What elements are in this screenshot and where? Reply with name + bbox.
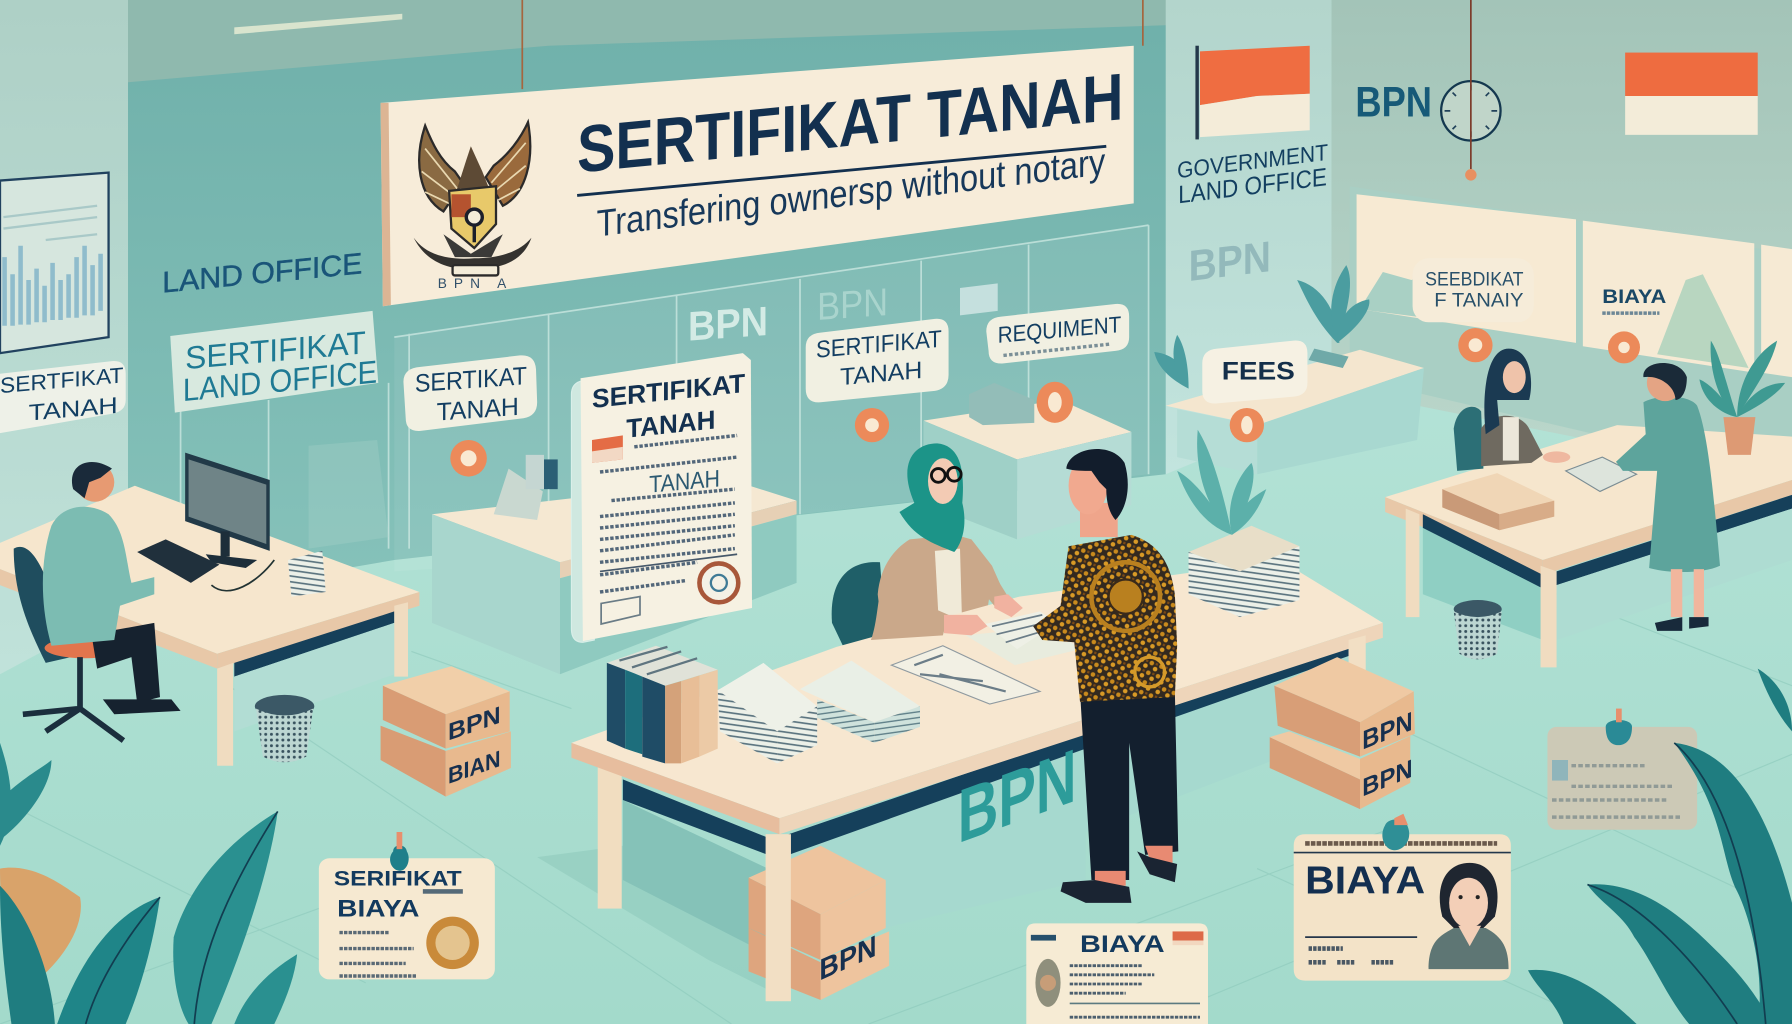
certificate document: TANAH [626, 404, 715, 444]
cardboard boxes under desk [749, 834, 889, 1001]
window label: seebdikat tanaiy: SEEBDIKAT [1425, 269, 1524, 291]
shirt [1033, 535, 1177, 702]
front leg [766, 834, 791, 1001]
bubble: fees with badge: FEES [1222, 357, 1295, 385]
monitor [185, 453, 270, 568]
jacket [875, 535, 1006, 640]
central service desk [571, 560, 1383, 1001]
left wall poster with chart [0, 173, 109, 353]
fees desk [1166, 349, 1424, 474]
standing person at right desk [1616, 363, 1720, 631]
blouse [935, 549, 962, 634]
window label: biaya: BIAYA [1602, 286, 1666, 308]
stacked papers on desk [718, 661, 920, 763]
cardboard boxes left [381, 666, 511, 797]
glass partitions [181, 225, 1149, 571]
sign subtitle text: Transfering ownersp without notary [597, 141, 1105, 246]
ankles [1095, 846, 1173, 886]
hair [1066, 449, 1128, 520]
orange badges on window [1458, 328, 1640, 363]
face [928, 458, 958, 504]
right desk with staff and papers [1385, 425, 1792, 667]
bubble: requirement with badge [986, 304, 1129, 423]
bubble: sertifikat tanah with badge: TANAH [840, 357, 922, 391]
plant on fees desk [1154, 265, 1369, 389]
shoes [1061, 880, 1131, 903]
bubble: sertikat tanah with badge: SERTIKAT [415, 362, 527, 398]
hijab [899, 443, 964, 552]
cardboard boxes left: BPN [448, 702, 501, 746]
cardboard boxes right: BPN [1362, 705, 1413, 755]
seated clerk at left desk [14, 462, 181, 741]
wall text: faded bpn: BPN [817, 281, 888, 329]
window label: seebdikat tanaiy: F TANAIY [1434, 289, 1523, 311]
notice on partition [960, 283, 998, 315]
glasses [931, 467, 961, 482]
bubble: sertikat tanah with badge [403, 355, 537, 477]
mouse and cable [211, 560, 274, 591]
bubble: sertifikat tanah with badge: SERTIFIKAT [816, 326, 942, 364]
card: biaya id with portrait [1294, 814, 1511, 981]
card: biaya id with portrait: BIAYA [1305, 860, 1425, 903]
flag on pillar [1195, 46, 1310, 139]
desk legs back [598, 766, 622, 909]
seated staff woman in hijab [832, 443, 1006, 647]
staff arms and hands over the desk [871, 544, 1023, 640]
loose forms on desk [891, 611, 1080, 704]
paper stack on desk [288, 551, 326, 597]
trousers [1080, 691, 1178, 880]
binders on desk [607, 646, 718, 763]
flag on right wall [1625, 53, 1758, 135]
right leg [1349, 635, 1366, 709]
bubble: sertifkat tanah [0, 361, 126, 433]
plant on stacked documents [1177, 430, 1299, 617]
seated woman at right desk [1454, 349, 1570, 471]
cardboard boxes left: BIAN [448, 745, 501, 789]
cardboard boxes right: BPN [1362, 753, 1413, 802]
card: biaya lower: BIAYA [1080, 931, 1165, 958]
desk top [571, 560, 1383, 818]
hanging wires of the sign [522, 0, 1143, 89]
wall text: bpn on pillar: BPN [1189, 233, 1271, 291]
bubble: sertifikat tanah with badge [806, 319, 949, 442]
card: biaya lower [1026, 923, 1208, 1024]
keyboard [137, 539, 219, 583]
wall text: government land office: GOVERNMENT [1177, 139, 1328, 183]
potted plant at right desk [1699, 341, 1785, 455]
cardboard boxes under desk: BPN [819, 928, 877, 987]
window label: seebdikat tanaiy [1413, 258, 1534, 322]
bubble: sertifkat tanah: SERTFIKAT [0, 362, 123, 398]
cardboard boxes right [1270, 657, 1415, 809]
card: sertifikat biaya: BIAYA [337, 896, 419, 923]
wall text: bpn beside clock: BPN [1355, 79, 1432, 126]
main title sign [381, 46, 1134, 306]
left side panel [623, 800, 768, 954]
sign title text: SERTIFIKAT TANAH [577, 60, 1123, 188]
left desk with workstation [0, 453, 419, 766]
foreground leaves left [0, 743, 297, 1024]
loose paper [1566, 457, 1637, 491]
certificate document: SERTIFIKAT [592, 368, 745, 414]
chair [832, 562, 886, 647]
neck and face [1080, 503, 1118, 537]
card: faded document [1547, 709, 1697, 830]
paper pile [1442, 473, 1554, 530]
trash bin left [255, 695, 314, 762]
panel: sertifikat land office [170, 311, 378, 413]
divider under title [577, 146, 1106, 195]
wall text: bpn: BPN [688, 298, 768, 350]
standing man in batik shirt [1033, 449, 1178, 903]
panel lettering: BPN [958, 731, 1077, 860]
emblem caption: BPN A [438, 276, 507, 291]
bubble: sertikat tanah with badge: TANAH [437, 393, 519, 427]
trash bin right [1454, 600, 1502, 659]
wall clock with rod [1441, 0, 1501, 181]
shirt medallion [1091, 562, 1165, 687]
foreground leaves right [1528, 669, 1792, 1024]
card: sertifikat biaya [319, 832, 495, 979]
certificate document [571, 353, 752, 642]
emblem: garuda [414, 122, 531, 275]
bubble: requirement with badge: REQUIMENT [998, 311, 1121, 348]
window panes [1350, 186, 1792, 480]
wall text: government land office [1177, 139, 1328, 209]
front panel [789, 642, 1349, 951]
bubble: sertifkat tanah: TANAH [29, 392, 118, 426]
panel: sertifikat land office: LAND OFFICE [183, 354, 377, 408]
back counter right [923, 383, 1131, 539]
wall text: land office: LAND OFFICE [162, 247, 362, 300]
certificate document: TANAH [649, 465, 720, 499]
back counter left [432, 455, 797, 674]
card: sertifikat biaya: SERIFIKAT [334, 866, 463, 891]
bubble: fees with badge [1202, 340, 1307, 442]
panel: sertifikat land office: SERTIFIKAT [185, 324, 366, 376]
portrait [1429, 863, 1509, 969]
wall text: government land office: LAND OFFICE [1178, 163, 1327, 209]
